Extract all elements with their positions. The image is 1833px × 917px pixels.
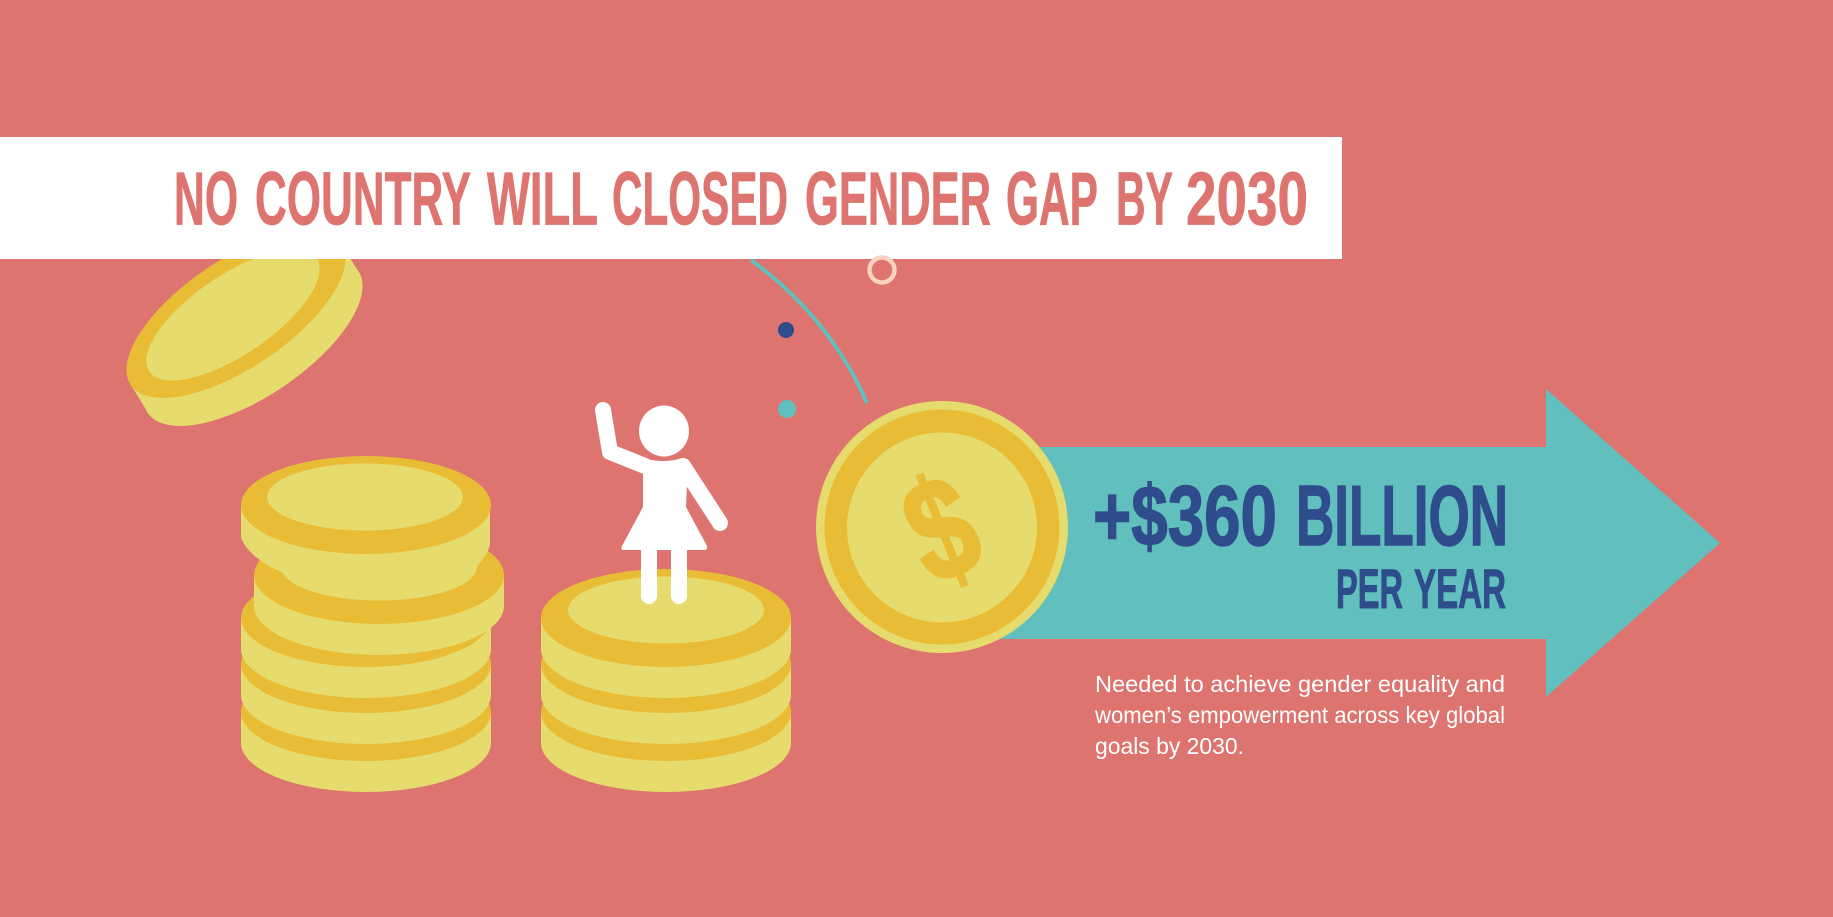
lowered arm (683, 466, 720, 523)
per year label (1336, 557, 1506, 620)
per year label: YEAR (1414, 557, 1506, 620)
title: COUNTRY (255, 156, 471, 240)
headline figure: +$360 (1093, 469, 1277, 564)
title: GENDER (805, 156, 991, 240)
description text: goals by 2030. (1095, 733, 1244, 759)
icon: flying coin (101, 198, 388, 458)
description text: women’s empowerment across key global (1094, 702, 1505, 728)
legs (641, 548, 657, 604)
teal arrow (950, 389, 1720, 697)
title banner (0, 137, 1342, 259)
description text (1094, 671, 1505, 759)
ring accent (870, 258, 894, 282)
title: NO (174, 156, 238, 240)
right coin stack (541, 569, 791, 792)
head (639, 406, 689, 456)
title: CLOSED (612, 156, 788, 240)
description text: Needed to achieve gender equality and (1095, 671, 1505, 697)
title (174, 156, 1308, 240)
title: 2030 (1186, 156, 1308, 240)
icon: dollar coin: $ (882, 442, 1001, 616)
icon: waving woman (603, 406, 720, 604)
title: WILL (487, 156, 598, 240)
navy dot (778, 322, 794, 338)
coin trajectory curve (751, 260, 867, 403)
left coin stack (241, 456, 504, 792)
raised arm (603, 410, 645, 466)
headline figure (1093, 469, 1508, 564)
top coin of left stack (241, 456, 491, 600)
per year label: PER (1336, 557, 1403, 620)
headline figure: BILLION (1296, 469, 1508, 564)
icon: dollar coin (816, 401, 1068, 653)
dress (621, 458, 707, 550)
teal dot (778, 400, 796, 418)
title: GAP (1006, 156, 1098, 240)
title: BY (1116, 156, 1173, 240)
